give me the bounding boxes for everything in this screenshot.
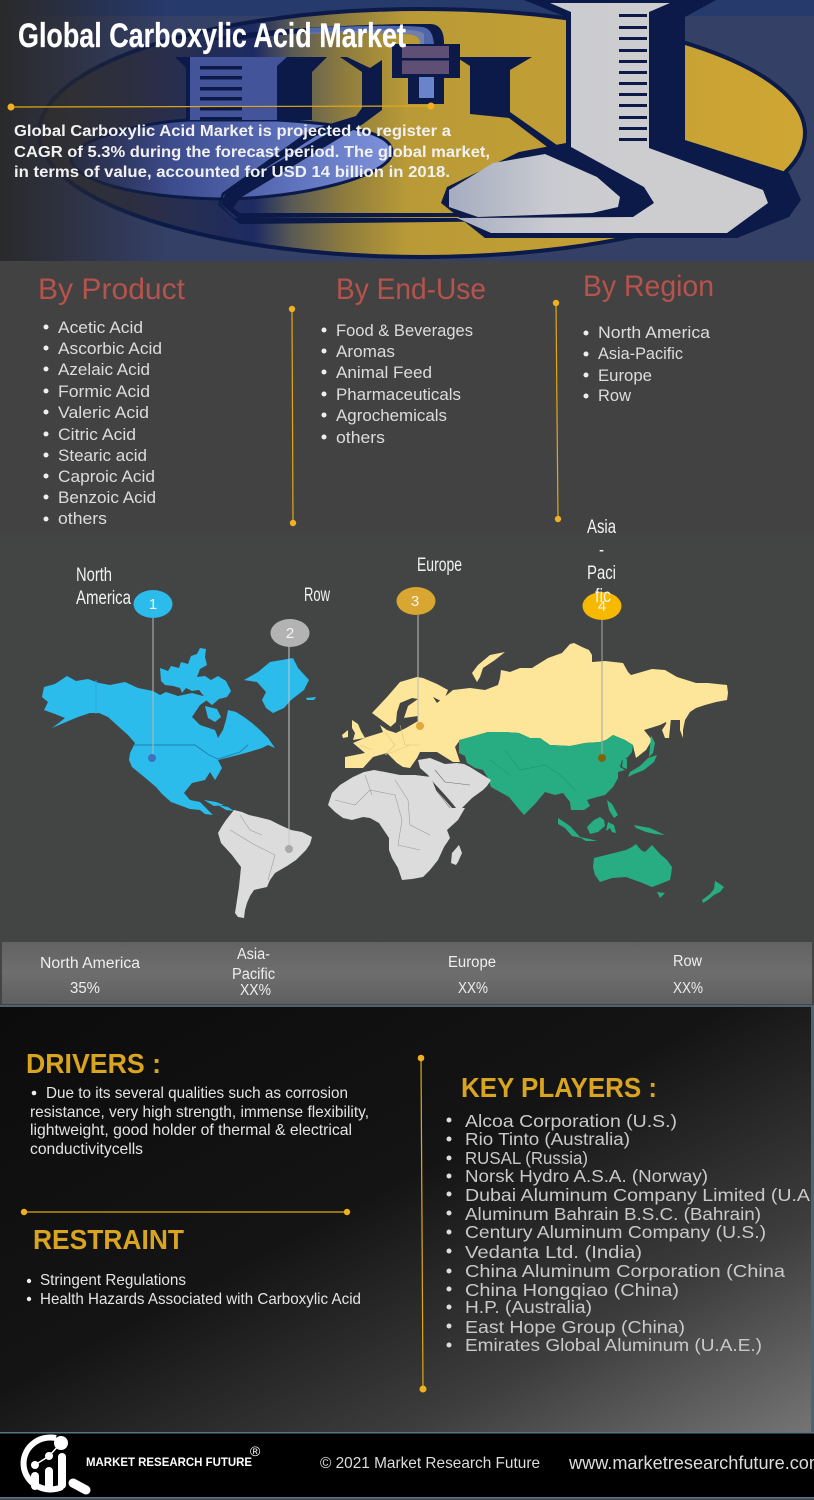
stat: asia-pacific: Pacific bbox=[232, 966, 275, 983]
marker 2: rest of world: 2 bbox=[286, 625, 294, 642]
heading: by product: By Product bbox=[38, 273, 186, 306]
icon: market research future logo bbox=[24, 1436, 86, 1491]
label: asia-pacific bbox=[587, 517, 616, 607]
list: key players: East Hope Group (China) bbox=[465, 1317, 685, 1337]
label: row: Row bbox=[304, 585, 330, 606]
list: products: Citric Acid bbox=[58, 425, 136, 444]
list: products bbox=[44, 318, 162, 528]
list: end uses: Agrochemicals bbox=[336, 406, 447, 425]
marker 3: europe: 3 bbox=[411, 593, 419, 610]
list: products: Acetic Acid bbox=[58, 318, 143, 337]
label: north america: North bbox=[76, 565, 112, 586]
label: asia-pacific: fic bbox=[595, 586, 611, 607]
label: europe: Europe bbox=[417, 555, 462, 576]
map: asia pacific bbox=[459, 732, 724, 903]
divider: key players bbox=[418, 1055, 426, 1392]
stat: asia-pacific: Asia- bbox=[237, 946, 270, 963]
stat: row: Row bbox=[673, 953, 703, 970]
heading: restraint: RESTRAINT bbox=[33, 1224, 184, 1255]
text: restraint bbox=[27, 1272, 361, 1308]
intro text: in terms of value, accounted for USD 14 billion in 2018. bbox=[14, 164, 450, 181]
marker 1: north america: 1 bbox=[149, 596, 157, 613]
icon: laboratory flasks illustration bbox=[0, 0, 805, 261]
panel: header banner bbox=[0, 0, 814, 261]
stat: asia-pacific bbox=[232, 946, 275, 999]
list: products: others bbox=[58, 509, 107, 528]
segment: by end-use bbox=[322, 273, 486, 447]
list: regions: North America bbox=[598, 323, 711, 342]
segment: by region bbox=[583, 270, 714, 405]
divider line with dots bbox=[8, 102, 434, 110]
text: restraint: Health Hazards Associated with Carboxylic Acid bbox=[40, 1291, 361, 1308]
panel: footer bbox=[0, 1432, 814, 1498]
text: drivers bbox=[30, 1085, 369, 1158]
text: drivers: resistance, very high strength, immense flexibility, bbox=[30, 1104, 369, 1121]
heading: by end-use: By End-Use bbox=[336, 273, 486, 306]
list: end uses: Food & Beverages bbox=[336, 321, 473, 340]
copyright: © 2021 Market Research Future bbox=[320, 1455, 540, 1472]
map: internal borders bbox=[230, 725, 575, 880]
list: products: Benzoic Acid bbox=[58, 488, 156, 507]
list: end uses: Animal Feed bbox=[336, 363, 432, 382]
divider: end-use and region bbox=[553, 300, 561, 522]
label: asia-pacific: Paci bbox=[587, 563, 616, 584]
marker 2: rest of world bbox=[270, 585, 330, 853]
stat: north america bbox=[40, 955, 140, 997]
stat: europe: Europe bbox=[448, 954, 496, 971]
list: regions bbox=[584, 323, 711, 405]
list: products: Caproic Acid bbox=[58, 467, 155, 486]
panel: drivers, restraint and key players bbox=[0, 1005, 814, 1432]
heading: key players: KEY PLAYERS : bbox=[461, 1072, 657, 1103]
map: north america bbox=[42, 648, 316, 815]
divider: product and end-use bbox=[289, 306, 296, 526]
text: drivers: lightweight, good holder of thermal & electrical bbox=[30, 1122, 352, 1139]
stat: north america: 35% bbox=[70, 980, 100, 997]
list: end uses: Pharmaceuticals bbox=[336, 385, 461, 404]
logo text: MARKET RESEARCH FUTURE bbox=[86, 1455, 252, 1469]
marker 3: europe bbox=[396, 555, 462, 730]
label: north america bbox=[76, 565, 131, 609]
list: key players: Rio Tinto (Australia) bbox=[465, 1129, 630, 1149]
marker 1: north america bbox=[76, 565, 172, 762]
stat: europe bbox=[448, 954, 496, 997]
marker 4: asia-pacific bbox=[582, 517, 622, 762]
text: restraint: Stringent Regulations bbox=[40, 1272, 186, 1289]
list: end uses: Aromas bbox=[336, 342, 395, 361]
list: regions: Asia-Pacific bbox=[598, 344, 683, 363]
registered mark: ® bbox=[250, 1443, 261, 1459]
panel: market segments bbox=[0, 261, 814, 533]
title: Global Carboxylic Acid Market bbox=[18, 17, 406, 55]
panel: regional share bar bbox=[2, 942, 812, 1004]
divider: drivers and restraint bbox=[21, 1209, 350, 1215]
heading: by region: By Region bbox=[583, 270, 714, 303]
stat: north america: North America bbox=[40, 955, 140, 972]
text: drivers: conductivitycells bbox=[30, 1141, 143, 1158]
list: products: Formic Acid bbox=[58, 382, 150, 401]
intro text: Global Carboxylic Acid Market is projected to register a bbox=[14, 123, 451, 140]
heading: drivers: DRIVERS : bbox=[26, 1048, 161, 1079]
label: asia-pacific: Asia bbox=[587, 517, 616, 538]
intro text bbox=[14, 123, 490, 181]
list: products: Stearic acid bbox=[58, 446, 147, 465]
list: key players: Century Aluminum Company (U.S.) bbox=[465, 1222, 766, 1242]
marker 4: asia-pacific: 4 bbox=[598, 598, 606, 615]
list: regions: Row bbox=[598, 386, 632, 405]
list: end uses bbox=[322, 321, 473, 447]
list: key players: Emirates Global Aluminum (U.A.E.) bbox=[465, 1335, 762, 1355]
text: drivers: Due to its several qualities such as corrosion bbox=[46, 1085, 348, 1102]
list: key players: Vedanta Ltd. (India) bbox=[465, 1242, 642, 1262]
intro text: CAGR of 5.3% during the forecast period. The global market, bbox=[14, 144, 490, 161]
list: regions: Europe bbox=[598, 366, 652, 385]
stat: row: XX% bbox=[673, 980, 703, 997]
label: north america: America bbox=[76, 588, 131, 609]
list: key players bbox=[446, 1111, 810, 1355]
segment: by product bbox=[38, 273, 186, 528]
list: key players: Dubai Aluminum Company Limited (U.A bbox=[465, 1185, 810, 1205]
label: asia-pacific: - bbox=[599, 540, 604, 561]
map: rest of world bbox=[218, 758, 491, 918]
list: key players: Norsk Hydro A.S.A. (Norway) bbox=[465, 1166, 708, 1186]
panel: world map bbox=[0, 517, 814, 942]
list: key players: China Hongqiao (China) bbox=[465, 1280, 679, 1300]
stat: row bbox=[673, 953, 703, 997]
list: products: Azelaic Acid bbox=[58, 360, 150, 379]
stat: europe: XX% bbox=[458, 980, 488, 997]
list: key players: Alcoa Corporation (U.S.) bbox=[465, 1111, 677, 1131]
list: key players: RUSAL (Russia) bbox=[465, 1148, 588, 1168]
list: end uses: others bbox=[336, 428, 385, 447]
list: key players: H.P. (Australia) bbox=[465, 1297, 592, 1317]
list: key players: China Aluminum Corporation (China bbox=[465, 1261, 785, 1281]
list: products: Ascorbic Acid bbox=[58, 339, 162, 358]
list: key players: Aluminum Bahrain B.S.C. (Bahrain) bbox=[465, 1204, 761, 1224]
list: products: Valeric Acid bbox=[58, 403, 149, 422]
map: europe and russia bbox=[342, 643, 728, 768]
stat: asia-pacific: XX% bbox=[240, 982, 271, 999]
